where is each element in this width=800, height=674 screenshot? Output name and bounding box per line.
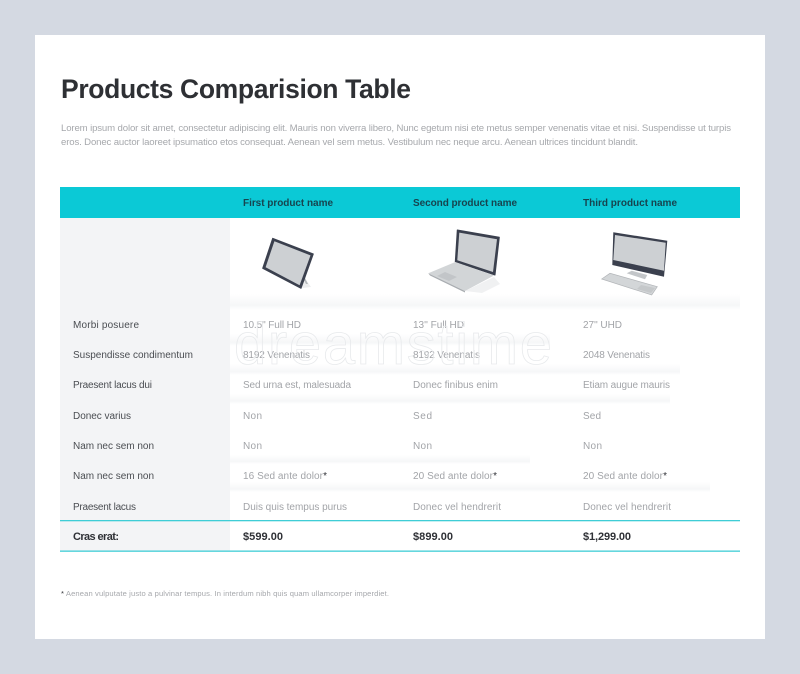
header labels: First product name bbox=[243, 198, 333, 209]
first product values: 16 Sed ante dolor* bbox=[243, 471, 327, 482]
intro paragraph: Lorem ipsum dolor sit amet, consectetur adipiscing elit. Mauris non viverra libero, Nunc egetum nisi ete metus semper venenatis vitae et nisi. Suspendisse ut turpis bbox=[61, 123, 731, 134]
third product values: Donec vel hendrerit bbox=[583, 502, 671, 513]
second product values bbox=[413, 320, 501, 543]
row labels: Donec varius bbox=[73, 411, 131, 422]
header labels: Second product name bbox=[413, 198, 517, 209]
second product values: 13'' Full HD bbox=[413, 320, 464, 331]
intro paragraph: eros. Donec auctor laoreet ipsumatico etos consequat. Aenean vel sem metus. Vestibulum nec neque arcu. Aenean ultrices tincidunt blandit. bbox=[61, 137, 638, 148]
first product values: Non bbox=[243, 441, 262, 452]
row labels: Praesent lacus bbox=[73, 502, 136, 513]
second product values: Donec finibus enim bbox=[413, 380, 498, 391]
first product values bbox=[243, 320, 351, 543]
first product values: 10.5'' Full HD bbox=[243, 320, 301, 331]
third product values: 20 Sed ante dolor* bbox=[583, 471, 667, 482]
row labels: Suspendisse condimentum bbox=[73, 350, 193, 361]
header labels bbox=[243, 198, 677, 209]
second product values: Non bbox=[413, 441, 432, 452]
second product values: Sed bbox=[413, 411, 432, 422]
footnote: * Aenean vulputate justo a pulvinar tempus. In interdum nibh quis quam ullamcorper imperdiet. bbox=[61, 589, 389, 598]
third product values: 2048 Venenatis bbox=[583, 350, 650, 361]
row labels: Morbi posuere bbox=[73, 320, 139, 331]
row shading bands bbox=[230, 294, 740, 492]
third product values: $1,299.00 bbox=[583, 531, 631, 543]
panel: comparison table bbox=[60, 187, 740, 552]
third product values: 27'' UHD bbox=[583, 320, 622, 331]
row label column background bbox=[60, 218, 230, 551]
row labels bbox=[73, 320, 193, 543]
first product values: Non bbox=[243, 411, 262, 422]
third product values: Etiam augue mauris bbox=[583, 380, 670, 391]
second product values: $899.00 bbox=[413, 531, 453, 543]
row labels: Praesent lacus dui bbox=[73, 380, 152, 391]
first product values: Duis quis tempus purus bbox=[243, 502, 347, 513]
row labels: Nam nec sem non bbox=[73, 441, 154, 452]
title: Products Comparision Table bbox=[61, 74, 411, 104]
header labels: Third product name bbox=[583, 198, 677, 209]
third product values bbox=[583, 320, 671, 543]
first product values: $599.00 bbox=[243, 531, 283, 543]
second product values: 8192 Venenatis bbox=[413, 350, 480, 361]
first product values: 8192 Venenatis bbox=[243, 350, 310, 361]
row labels: Nam nec sem non bbox=[73, 471, 154, 482]
second product values: 20 Sed ante dolor* bbox=[413, 471, 497, 482]
intro paragraph bbox=[61, 123, 731, 148]
icon: desktop computer bbox=[602, 232, 667, 295]
row labels: Cras erat: bbox=[73, 531, 119, 543]
watermark: dreamstime bbox=[234, 312, 552, 377]
second product values: Donec vel hendrerit bbox=[413, 502, 501, 513]
icon: tablet bbox=[263, 238, 313, 288]
header bar bbox=[60, 187, 740, 218]
icon: laptop bbox=[428, 230, 500, 293]
first product values: Sed urna est, malesuada bbox=[243, 380, 351, 391]
third product values: Non bbox=[583, 441, 602, 452]
third product values: Sed bbox=[583, 411, 601, 422]
